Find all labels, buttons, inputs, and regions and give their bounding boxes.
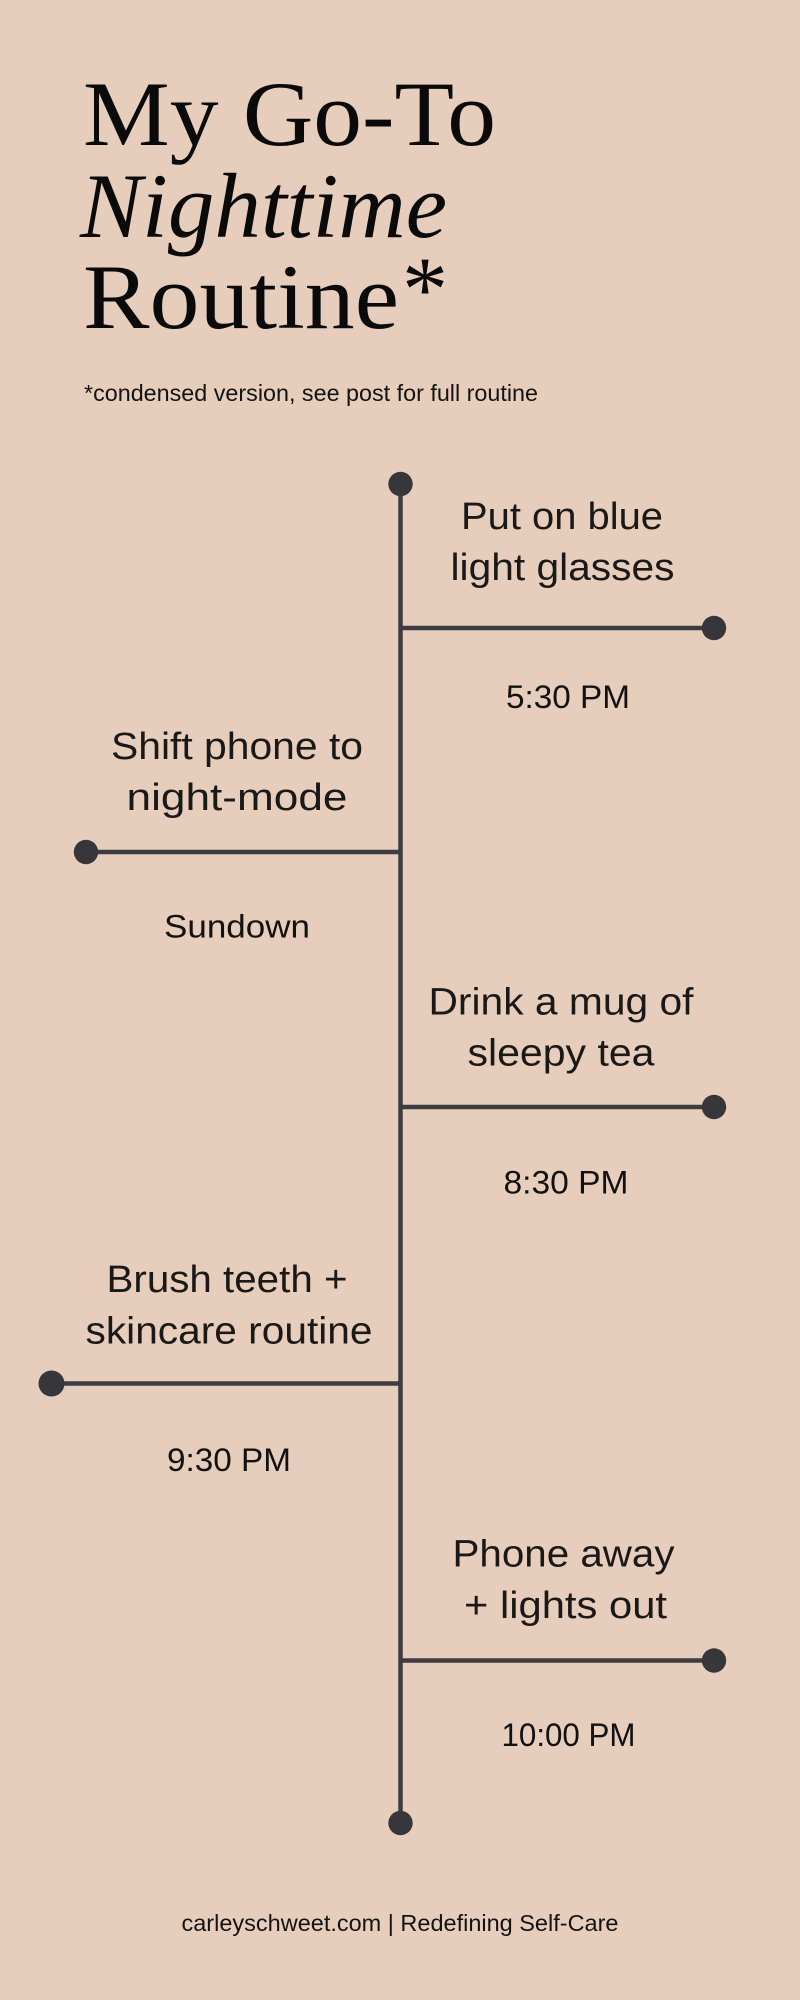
title: Nighttime (79, 155, 447, 257)
step 4: skincare (38, 1259, 401, 1478)
footer: carleyschweet.com | Redefining Self-Care (182, 1910, 618, 1936)
step 2: night mode (74, 726, 401, 944)
step 5: lights out: + lights out (464, 1585, 667, 1627)
title: Routine (83, 246, 399, 348)
step 1: blue light glasses: Put on blue (461, 496, 663, 538)
title (79, 63, 496, 348)
step 2: night mode: Sundown (164, 908, 310, 944)
step 3: sleepy tea (400, 982, 726, 1200)
step 1: blue light glasses: light glasses (450, 547, 674, 589)
step 3: sleepy tea: sleepy tea (468, 1032, 655, 1074)
step 5: lights out: 10:00 PM (502, 1717, 636, 1753)
step 4: skincare: skincare routine (86, 1310, 372, 1352)
step 1: blue light glasses: 5:30 PM (506, 679, 630, 715)
title: My Go-To (83, 63, 496, 165)
step 4: skincare: 9:30 PM (167, 1442, 291, 1478)
step 3: sleepy tea: 8:30 PM (504, 1164, 628, 1200)
step 2: night mode: night-mode (126, 777, 348, 819)
footnote: *condensed version, see post for full routine (84, 380, 538, 406)
step 5: lights out (400, 1534, 726, 1753)
step 4: skincare: Brush teeth + (106, 1259, 348, 1301)
timeline spine (388, 472, 413, 1835)
step 3: sleepy tea: Drink a mug of (428, 982, 694, 1024)
step 1: blue light glasses (400, 496, 726, 715)
title: * (402, 238, 448, 340)
step 2: night mode: Shift phone to (111, 726, 363, 768)
step 5: lights out: Phone away (452, 1534, 674, 1576)
